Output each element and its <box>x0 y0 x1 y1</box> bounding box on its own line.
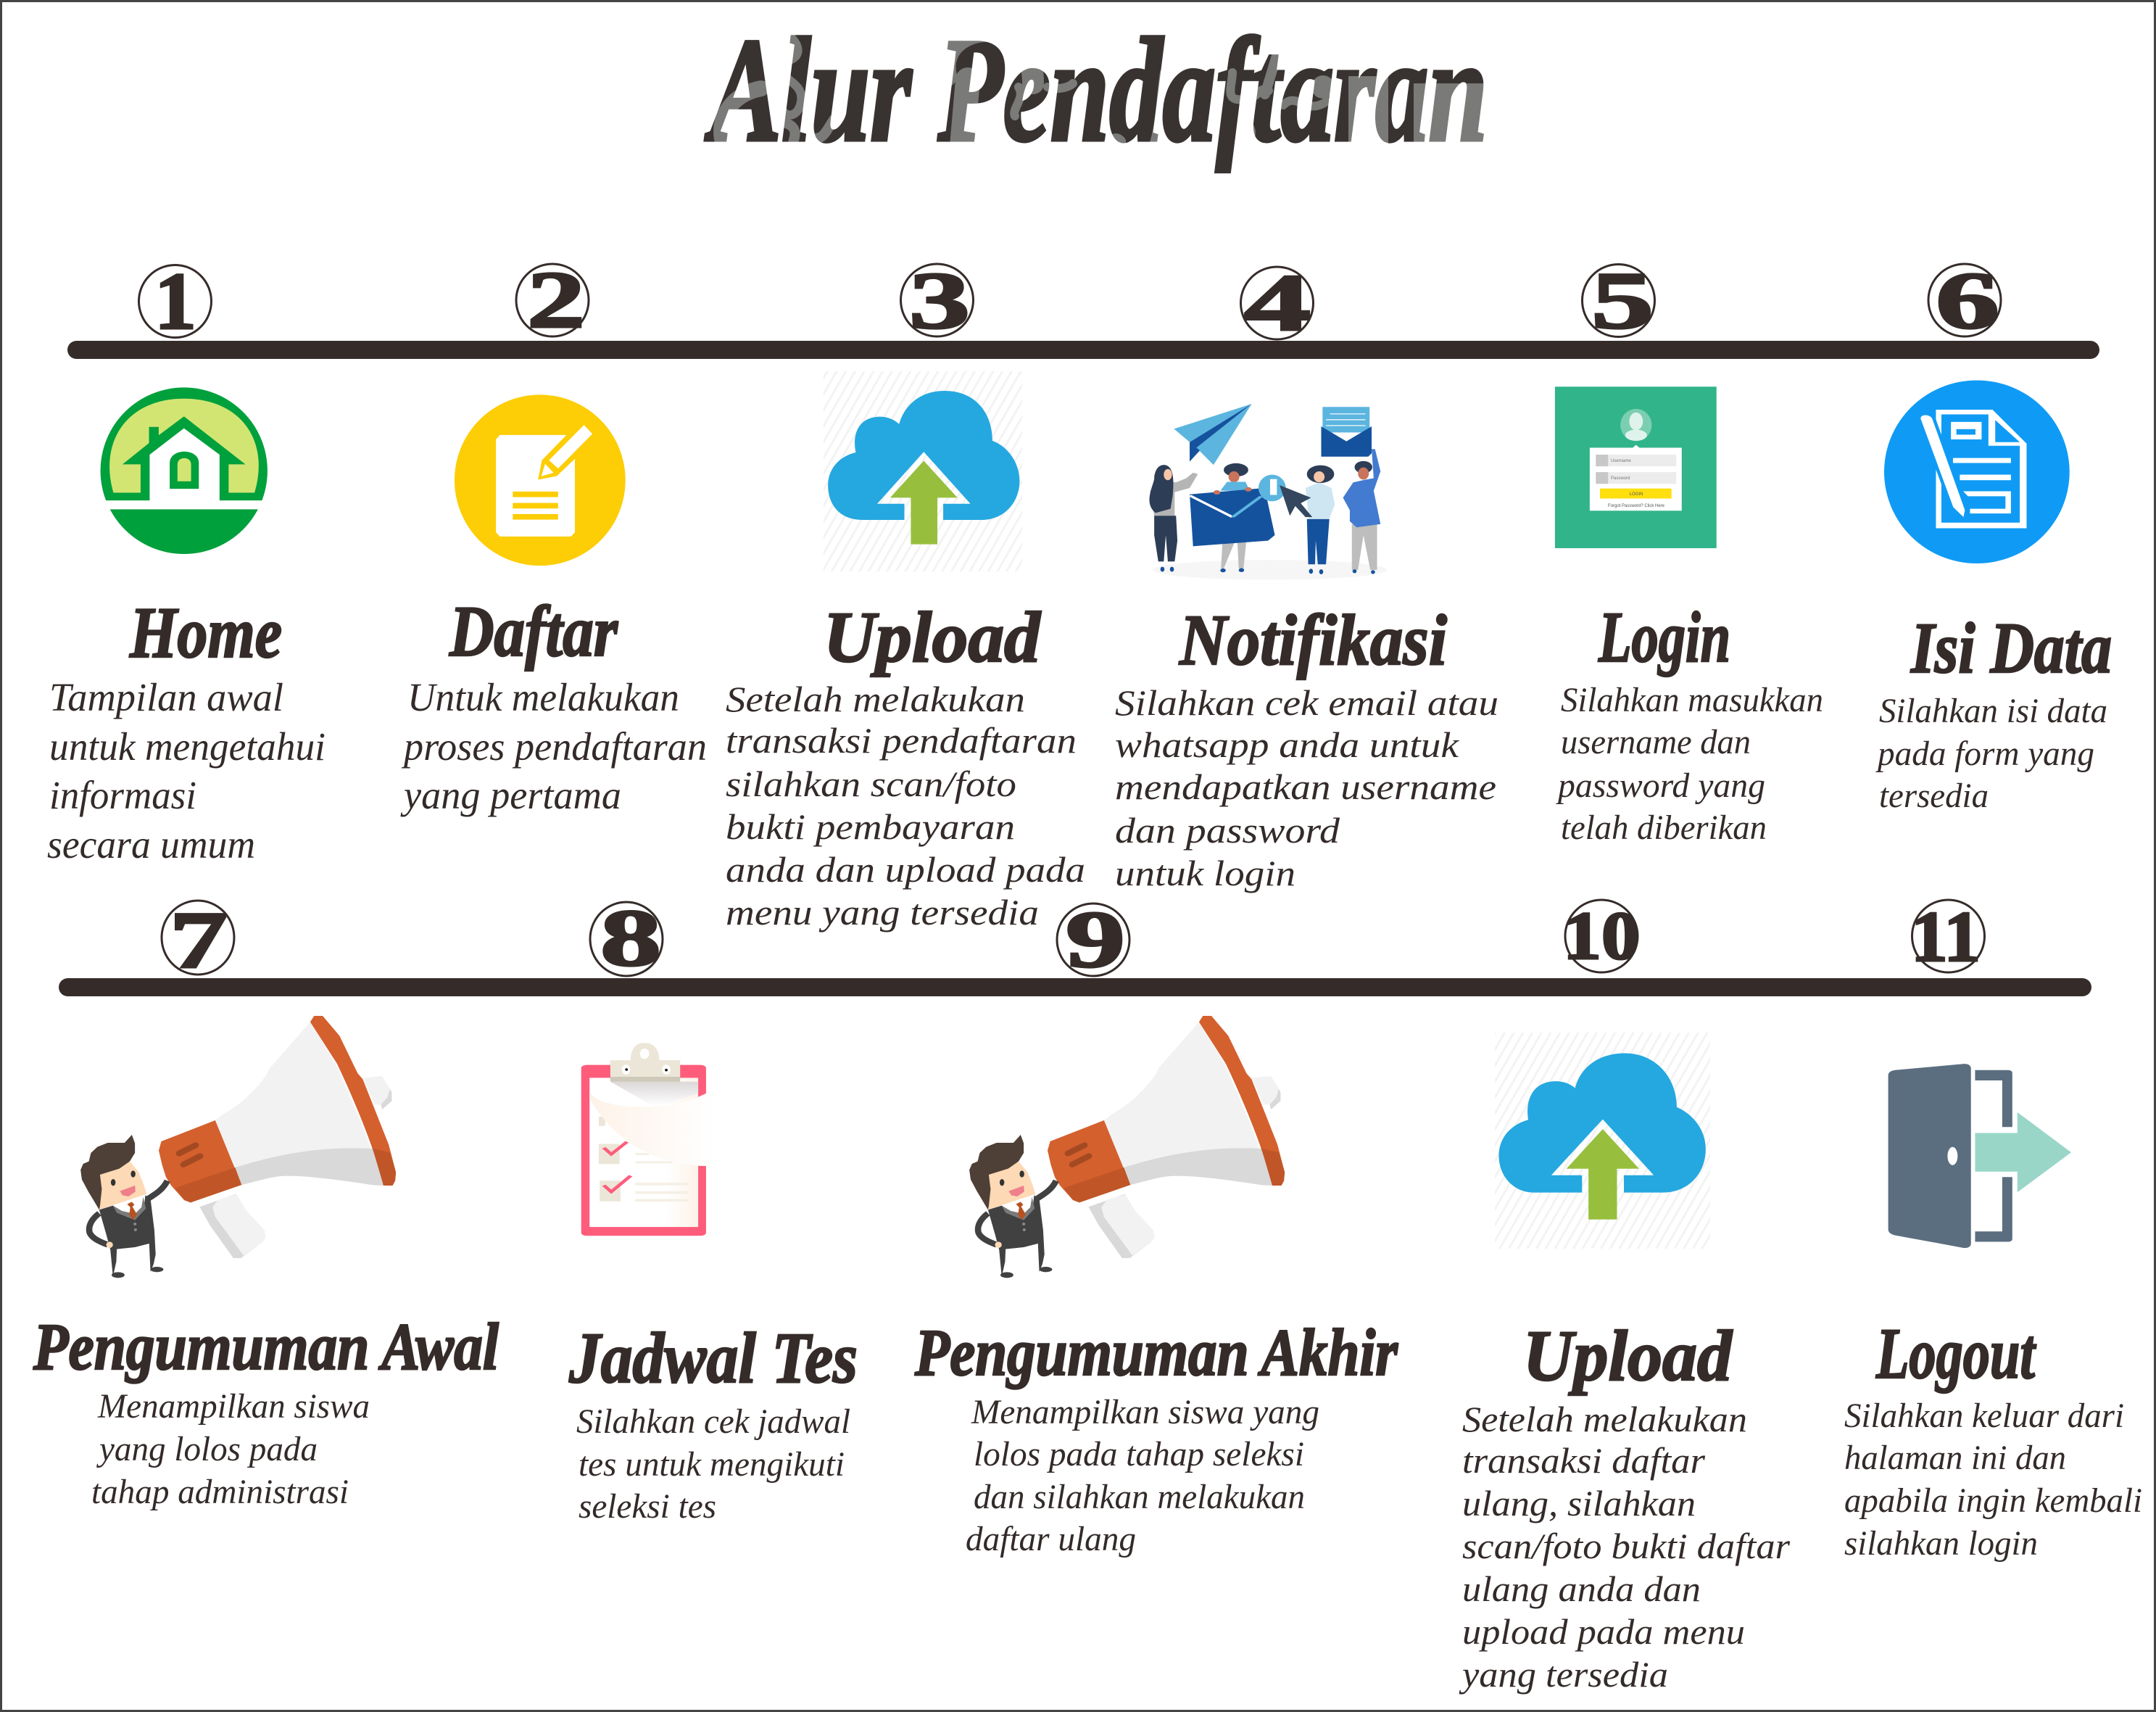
description: Notifikasi: Silahkan cek email atau <box>1115 682 1498 723</box>
description: Pengumuman Awal: tahap administrasi <box>91 1473 349 1511</box>
description: Notifikasi: whatsapp anda untuk <box>1115 724 1459 765</box>
number badge 6: 6 <box>1936 256 1999 346</box>
panel: step 3 Upload <box>726 256 1085 932</box>
number badge 6 <box>1928 256 2001 346</box>
panel: step 1 Home <box>47 257 326 867</box>
description: Upload: menu yang tersedia <box>726 892 1039 932</box>
number badge 5 <box>1582 256 1654 346</box>
description: Isi Data: tersedia <box>1879 777 1989 815</box>
description: Upload: anda dan upload pada <box>726 849 1085 890</box>
heading: Upload: Upload <box>1523 1315 1733 1396</box>
title: Alur Pendaftaran <box>705 8 1488 173</box>
description: Jadwal Tes <box>576 1402 850 1526</box>
description: Notifikasi: untuk login <box>1115 853 1295 893</box>
icon: login screen: Forgot Password? Click Here <box>1608 504 1665 508</box>
description: Login: password yang <box>1556 766 1765 805</box>
description: Jadwal Tes: tes untuk mengikuti <box>579 1445 845 1484</box>
icon: cloud upload <box>1495 1033 1710 1249</box>
panel: step 10 Upload <box>1459 898 1791 1695</box>
icon: home <box>89 387 283 554</box>
heading: Home: Home <box>129 592 282 673</box>
icon: login screen: LOGIN <box>1630 492 1643 497</box>
description: Upload: silahkan scan/foto <box>726 764 1016 804</box>
description: Logout: Silahkan keluar dari <box>1844 1397 2124 1435</box>
description: Pengumuman Akhir: Menampilkan siswa yang <box>971 1393 1319 1431</box>
number badge 2 <box>516 255 589 345</box>
number badge 1: 1 <box>154 257 196 347</box>
number badge 4 <box>1241 258 1314 348</box>
number badge 10: 10 <box>1563 898 1640 974</box>
description: Upload: transaksi daftar <box>1462 1440 1706 1481</box>
description: Login <box>1556 681 1823 847</box>
icon: man with megaphone <box>80 1016 396 1278</box>
description: Jadwal Tes: seleksi tes <box>579 1487 716 1526</box>
heading: Daftar: Daftar <box>449 591 618 671</box>
description: Isi Data: pada form yang <box>1875 735 2094 773</box>
heading: Pengumuman Akhir: Pengumuman Akhir <box>914 1315 1398 1389</box>
description: Upload <box>726 679 1085 932</box>
number badge 9 <box>1057 895 1129 985</box>
description: Pengumuman Awal: yang lolos pada <box>96 1430 318 1468</box>
description: Upload: upload pada menu <box>1462 1611 1745 1652</box>
panel: step 8 Jadwal Tes <box>568 893 858 1526</box>
description: Home <box>47 675 326 867</box>
timeline bar: top row <box>67 341 2099 359</box>
description: Daftar: yang pertama <box>400 773 621 817</box>
description: Logout: apabila ingin kembali <box>1844 1481 2142 1520</box>
description: Jadwal Tes: Silahkan cek jadwal <box>576 1402 850 1441</box>
description: Login: telah diberikan <box>1561 809 1767 847</box>
description: Upload: Setelah melakukan <box>726 679 1025 719</box>
panel: step 4 Notifikasi <box>1115 258 1498 893</box>
description: Upload: transaksi pendaftaran <box>726 720 1077 761</box>
description: Logout: halaman ini dan <box>1844 1439 2066 1477</box>
heading: Logout: Logout <box>1875 1313 2036 1394</box>
panel: step 7 Pengumuman Awal <box>33 896 499 1511</box>
icon: login screen: Password <box>1611 476 1630 481</box>
icon: document and pen <box>1884 380 2070 563</box>
number badge 4: 4 <box>1244 258 1311 348</box>
heading: Pengumuman Awal: Pengumuman Awal <box>33 1310 499 1384</box>
description: Notifikasi: dan password <box>1115 810 1340 851</box>
description: Upload: ulang anda dan <box>1462 1568 1701 1609</box>
description: Pengumuman Akhir: daftar ulang <box>966 1520 1136 1558</box>
icon: login screen: Username <box>1611 459 1631 463</box>
description: Pengumuman Awal <box>91 1387 370 1511</box>
icon: man with megaphone <box>969 1016 1285 1278</box>
number badge 7 <box>162 896 234 985</box>
description: Home: informasi <box>49 773 196 817</box>
panel: step 9 Pengumuman Akhir <box>914 895 1398 1558</box>
icon: clipboard checklist <box>581 1043 802 1236</box>
description: Daftar <box>400 675 707 817</box>
icon: cloud upload <box>824 371 1022 571</box>
number badge 11: 11 <box>1911 896 1981 977</box>
description: Daftar: proses pendaftaran <box>401 724 707 769</box>
panel: step 11 Logout <box>1844 896 2142 1563</box>
panel: step 6 Isi Data <box>1875 256 2112 815</box>
number badge 8 <box>590 893 663 983</box>
description: Upload: scan/foto bukti daftar <box>1462 1526 1791 1566</box>
description: Login: Silahkan masukkan <box>1561 681 1823 719</box>
icon: form and pencil <box>455 394 626 566</box>
number badge 8: 8 <box>600 893 661 983</box>
number badge 9: 9 <box>1066 895 1125 985</box>
description: Logout: silahkan login <box>1844 1524 2038 1563</box>
icon: door exit <box>1888 1064 2071 1248</box>
number badge 2: 2 <box>527 255 585 345</box>
number badge 3: 3 <box>909 256 970 346</box>
description: Home: Tampilan awal <box>49 675 283 719</box>
description: Pengumuman Akhir <box>966 1393 1319 1558</box>
description: Notifikasi: mendapatkan username <box>1115 766 1496 807</box>
number badge 5: 5 <box>1591 256 1654 346</box>
description: Login: username dan <box>1561 723 1751 761</box>
description: Upload: ulang, silahkan <box>1462 1483 1696 1523</box>
heading: Upload: Upload <box>824 597 1042 677</box>
description: Upload: Setelah melakukan <box>1462 1399 1747 1439</box>
description: Home: untuk mengetahui <box>49 724 326 769</box>
description: Logout <box>1844 1397 2142 1563</box>
description: Isi Data: Silahkan isi data <box>1879 692 2107 730</box>
timeline bar: bottom row <box>59 978 2091 996</box>
panel: step 5 Login <box>1555 256 1823 847</box>
number badge 7: 7 <box>170 896 228 985</box>
panel: step 2 Daftar <box>400 255 707 817</box>
number badge 1 <box>139 257 212 347</box>
description: Home: secara umum <box>47 822 255 867</box>
description: Upload <box>1459 1399 1791 1695</box>
description: Notifikasi <box>1115 682 1498 893</box>
heading: Login: Login <box>1598 597 1730 677</box>
description: Isi Data <box>1875 692 2107 815</box>
description: Daftar: Untuk melakukan <box>407 675 679 719</box>
description: Pengumuman Akhir: dan silahkan melakukan <box>974 1478 1305 1516</box>
icon: people with envelope <box>1150 404 1388 580</box>
heading: Isi Data: Isi Data <box>1910 608 2112 688</box>
description: Upload: yang tersedia <box>1459 1654 1668 1695</box>
description: Pengumuman Awal: Menampilkan siswa <box>97 1387 370 1426</box>
icon: login screen <box>1555 386 1717 548</box>
heading: Notifikasi: Notifikasi <box>1179 600 1447 680</box>
description: Upload: bukti pembayaran <box>726 806 1015 847</box>
number badge 3 <box>900 256 973 346</box>
description: Pengumuman Akhir: lolos pada tahap seleksi <box>974 1435 1304 1473</box>
heading: Jadwal Tes: Jadwal Tes <box>568 1318 858 1398</box>
